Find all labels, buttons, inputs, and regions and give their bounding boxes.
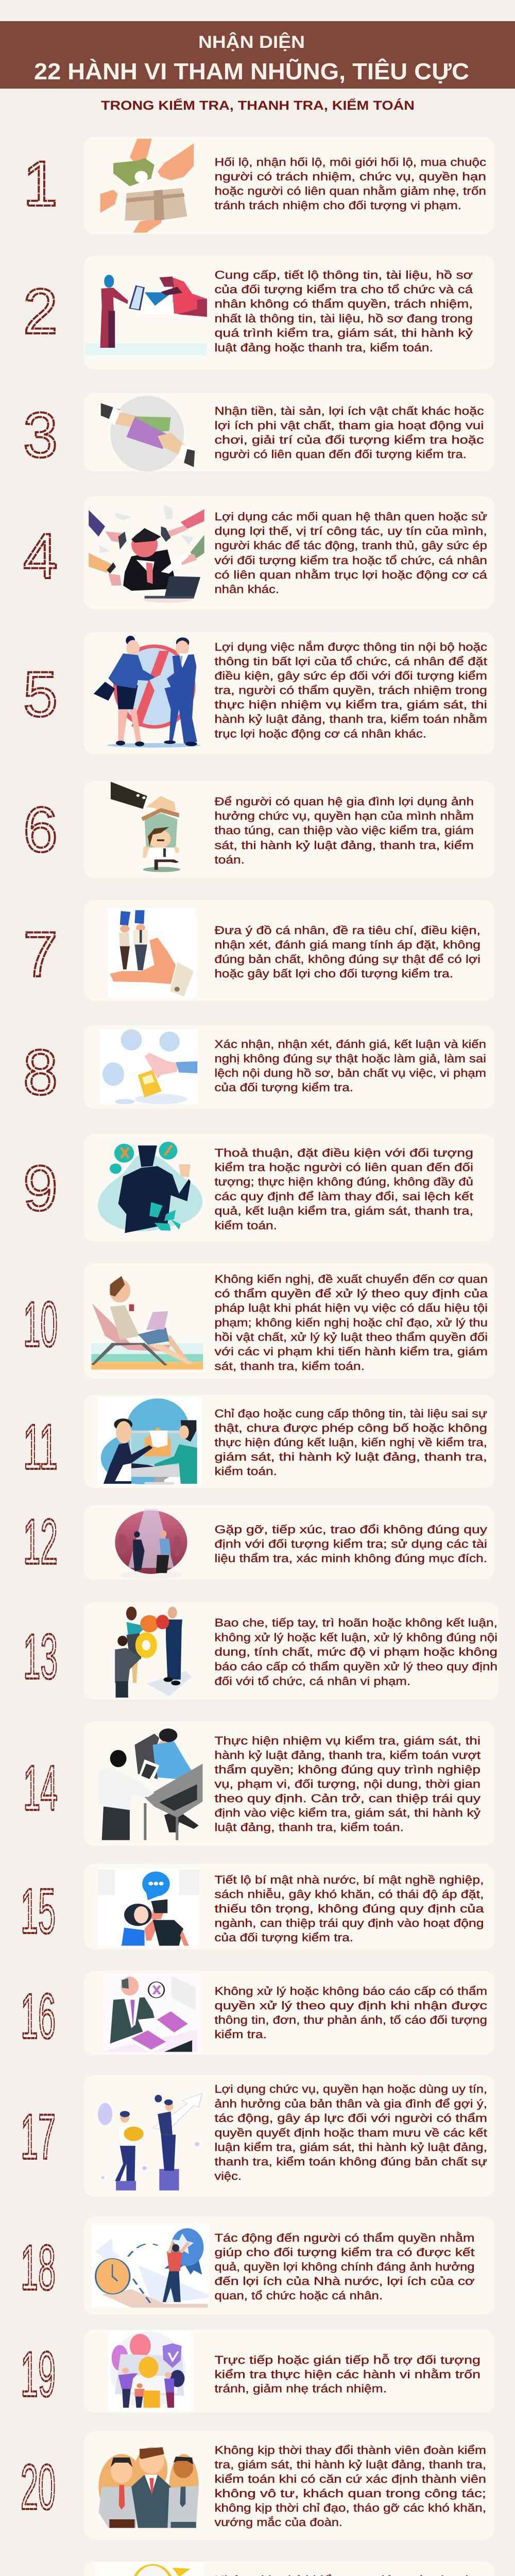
number 4: 4 (23, 521, 58, 592)
number 2: 2 (23, 276, 58, 347)
text block: Lợi dụng việc nắm được thông tin nội bộ hoặc (214, 640, 487, 653)
icon: handshake with banknotes (101, 396, 195, 471)
text block: Chỉ đạo hoặc cung cấp thông tin, tài liệu sai sự (214, 1407, 487, 1420)
text block: kiểm toán. (214, 1219, 277, 1232)
icon: two officers reviewing documents at desk (98, 1728, 203, 1840)
icon: hand controlling a puppet man (111, 782, 180, 872)
text block: kiểm toán. (214, 1465, 277, 1478)
icon: two business people with prohibition sign (94, 636, 201, 748)
text block: luật đảng hoặc thanh tra, kiểm toán. (214, 341, 433, 354)
text block (214, 2231, 475, 2302)
text block: Cung cấp, tiết lộ thông tin, tài liệu, hồ sơ (214, 268, 473, 281)
icon: two figures on a giant hand (108, 908, 196, 998)
panel 12 (23, 1505, 494, 1580)
panel 7 (23, 900, 494, 1001)
text block: giám sát, thi hành kỷ luật đảng, thanh tra, (214, 1450, 487, 1463)
panel 13 (23, 1602, 499, 1700)
panel 20 (21, 2431, 494, 2539)
panel 18: 18 (21, 2232, 56, 2303)
panel 19 (21, 2330, 494, 2413)
text block: sát, thanh tra, kiểm toán. (214, 1360, 365, 1372)
text block: nhất là thông tin, tài liệu, hồ sơ đang trong (214, 312, 473, 325)
text block: tránh trách nhiệm cho đối tượng vi phạm. (214, 199, 461, 212)
icon: person handing envelope (85, 275, 207, 355)
text block: nhận xét, đánh giá mang tính áp đặt, không (214, 938, 480, 951)
title line 1: NHẬN DIỆN (198, 32, 305, 52)
text block: chơi, giải trí của đối tượng kiểm tra hoặc (214, 433, 484, 446)
text block: kiểm toán khi có căn cứ xác định thành viên (214, 2472, 486, 2485)
panel 2 (23, 256, 494, 369)
text block: lợi ích phi vật chất, tham gia hoạt động vui (214, 419, 484, 432)
text block: của đối tượng kiểm tra. (214, 1081, 353, 1094)
text block: phạm; không kiến nghị hoặc chỉ đạo, xử lý thu (214, 1316, 488, 1329)
panel 1 (23, 137, 494, 234)
text block (214, 404, 484, 461)
text block: hưởng chức vụ, quyền hạn của mình nhằm (214, 809, 474, 822)
text block (214, 2353, 480, 2395)
text block (214, 1407, 487, 1478)
text block: đúng bản chất, không đúng sự thật để có lợi (214, 953, 480, 965)
panel 19: 19 (21, 2339, 56, 2410)
text block: dụng lợi thế, vị trí công tác, uy tín của mình, (214, 524, 487, 537)
number 8: 8 (23, 1037, 58, 1108)
panel 15: 15 (21, 1876, 56, 1947)
text block: kiểm tra thực hiện các hành vi nhằm trốn (214, 2368, 480, 2381)
text block: thật, chưa được phép công bố hoặc không (214, 1421, 487, 1434)
panel 10 (23, 1263, 494, 1379)
text block: không kịp thời chỉ đạo, tháo gỡ các khó khăn, (214, 2501, 486, 2514)
text block: định vào việc kiểm tra, giám sát, thi hành kỷ (214, 1806, 480, 1819)
panel 13: 13 (23, 1621, 58, 1692)
icon: two people meeting under spotlight (115, 1509, 187, 1579)
text block: với các vi phạm khi tiến hành kiểm tra, giám (214, 1345, 488, 1358)
text block: luận kiểm tra, giám sát, thi hành kỷ luật đảng, (214, 2141, 487, 2154)
text block: thẩm quyền; không đúng quy trình nghiệp (214, 1763, 480, 1776)
text block (214, 510, 488, 596)
title line 2: 22 HÀNH VI THAM NHŨNG, TIÊU CỰC (34, 58, 469, 84)
text block (214, 1273, 488, 1372)
text block: quả, kết luận kiểm tra, giám sát, thanh tra, (214, 1205, 473, 1217)
number 11: 11 (23, 1412, 58, 1483)
panel 11 (23, 1395, 494, 1488)
text block: toán. (214, 853, 245, 866)
panel 16: 16 (21, 1981, 56, 2052)
text block: quả, quyền lợi không chính đáng ảnh hưởng (214, 2260, 475, 2273)
text block: vụ, phạm vi, đối tượng, nội dung, thời gian (214, 1777, 480, 1790)
text block: quan, tổ chức hoặc cá nhân. (214, 2289, 383, 2302)
text block: Không xử lý hoặc không báo cáo cấp có thẩm (214, 1985, 487, 1997)
text block: Thoả thuận, đặt điều kiện với đối tượng (214, 1146, 473, 1159)
text block: sát, thi hành kỷ luật đảng, thanh tra, kiểm (214, 839, 474, 852)
icon: two men on pillars with coins and arrow (98, 2093, 202, 2191)
text block: vướng mắc của đoàn. (214, 2516, 342, 2529)
panel 6 (23, 781, 494, 878)
text block: Lợi dụng các mối quan hệ thân quen hoặc sử (214, 510, 487, 523)
number 6: 6 (23, 794, 58, 866)
text block: quá trình kiểm tra, giám sát, thi hành kỷ (214, 327, 473, 339)
icon: businessman hiding money behind back (98, 1142, 202, 1233)
number 5: 5 (23, 659, 58, 730)
text block: thực hiện nhiệm vụ kiểm tra, giám sát, thi (214, 698, 487, 711)
text block: định với đối tượng kiểm tra; sử dụng các tài (214, 1537, 487, 1550)
panel 3 (23, 393, 494, 471)
text block: thông tin bất lợi của tổ chức, cá nhân để đặt (214, 655, 487, 668)
text block: trục lợi hoặc động cơ cá nhân khác. (214, 727, 426, 740)
text block: việc. (214, 2170, 242, 2182)
panel 14: 14 (23, 1753, 58, 1824)
text block: Để người có quan hệ gia đình lợi dụng ảnh (214, 795, 474, 808)
text block (214, 268, 473, 354)
text block: Hối lộ, nhận hối lộ, môi giới hối lộ, mua chuộc (214, 156, 486, 168)
text block: tra, người có thẩm quyền, trách nhiệm trong (214, 684, 487, 697)
icon: business people assembling gears (115, 1606, 192, 1698)
text block: Thực hiện nhiệm vụ kiểm tra, giám sát, thi (214, 1734, 480, 1747)
text block (214, 1734, 480, 1834)
text block: các quy định để làm thay đổi, sai lệch kết (214, 1190, 473, 1202)
text block: kiểm tra hoặc người có liên quan đến đối (214, 1161, 473, 1174)
text block: pháp luật khi phát hiện vụ việc có dấu hiệu tội (214, 1301, 488, 1314)
icon: man whispering to woman (97, 1869, 199, 1946)
text block: người có trách nhiệm, chức vụ, quyền hạn (214, 170, 486, 183)
number 7: 7 (23, 919, 58, 990)
number 1: 1 (23, 148, 58, 219)
text block: theo quy định. Cản trở, can thiệp trái quy (214, 1792, 480, 1805)
text block: báo cáo cấp có thẩm quyền xử lý theo quy định (214, 1660, 497, 1673)
icon: hands exchanging money and box (100, 139, 194, 233)
text block: người có liên quan đến đối tượng kiểm tra. (214, 448, 467, 461)
panel 12: 12 (23, 1506, 58, 1578)
text block: Không kịp thời thay đổi thành viên đoàn kiểm (214, 2444, 486, 2456)
panel 18 (21, 2217, 494, 2314)
icon: two men shaking hands with envelope on screen (98, 1397, 202, 1485)
text block: không xử lý hoặc kết luận, xử lý không đúng nội (214, 1631, 497, 1643)
panel 21 (21, 2562, 494, 2576)
text block: đối với tổ chức, cá nhân vi phạm. (214, 1674, 410, 1688)
icon: hand holding forged document with speech bubbles (100, 1029, 197, 1104)
text block: Trực tiếp hoặc gián tiếp hỗ trợ đối tượng (214, 2353, 480, 2366)
text block: hành kỷ luật đảng, thanh tra, kiểm toán vượt (214, 1749, 480, 1761)
icon: man relaxing on beach chair with laptop (91, 1276, 203, 1369)
icon: official refusing with cross bubble and books (104, 1974, 199, 2053)
text block: tác động, gây áp lực đối với người có thẩm (214, 2111, 487, 2125)
text block: sách nhiễu, gây khó khăn, có thái độ áp đặt, (214, 1888, 484, 1901)
text block: lệch nội dung hồ sơ, bản chất vụ việc, vi phạm (214, 1066, 486, 1079)
icon: people around calendar with coin and shield (108, 2330, 192, 2412)
text block: quyền xử lý theo quy định khi nhận được (214, 1999, 487, 2012)
text block: hành kỷ luật đảng, thanh tra, kiểm toán nhằm (214, 713, 487, 725)
text block: thanh tra, kiểm toán không đúng bản chất sự (214, 2155, 487, 2168)
text block: tượng; thực hiện không đúng, không đầy đủ (214, 1175, 473, 1188)
text block (214, 924, 480, 980)
text block: nhân khác. (214, 583, 279, 596)
text block: thông tin, đơn, thư phản ánh, tố cáo đối tượng (214, 2013, 487, 2026)
text block (214, 2082, 487, 2182)
text block: thao túng, can thiệp vào việc kiểm tra, giám (214, 824, 474, 837)
text block (214, 795, 474, 866)
text block: giúp cho đối tượng kiểm tra có được kết (214, 2246, 475, 2259)
panel 8 (23, 1025, 494, 1109)
text block (214, 1985, 487, 2041)
text block: điều kiện, gây sức ép đối với đối tượng kiểm (214, 669, 487, 682)
panel 20: 20 (21, 2452, 56, 2523)
panel 4 (23, 496, 494, 609)
text block: ngành, can thiệp trái quy định vào hoạt động (214, 1917, 484, 1929)
panel 5 (23, 632, 494, 754)
text block: Tác động đến người có thẩm quyền nhằm (214, 2231, 475, 2244)
text block: hồi vật chất, xử lý kỷ luật theo thẩm quyền đối (214, 1330, 488, 1344)
panel 16 (21, 1971, 494, 2055)
text block: có thẩm quyền để xử lý theo quy định của (214, 1287, 488, 1300)
text block: thực hiện đúng kết luận, kiến nghị về kiểm tra, (214, 1436, 487, 1449)
panel 17 (21, 2075, 494, 2197)
text block: đến lợi ích của Nhà nước, lợi ích của cơ (214, 2275, 475, 2287)
text block: kiểm tra. (214, 2028, 267, 2041)
header band with title (0, 21, 515, 89)
text block: luật đảng, thanh tra, kiểm toán. (214, 1821, 404, 1834)
subtitle: TRONG KIỂM TRA, THANH TRA, KIỂM TOÁN (101, 98, 415, 113)
text block: quyền quyết định hoặc tham mưu về các kết (214, 2126, 487, 2139)
text block: Nhận tiền, tài sản, lợi ích vật chất khác hoặc (214, 404, 484, 417)
text block: của đối tượng kiểm tra cho tổ chức và cá (214, 283, 473, 296)
text block: hoặc gây bất lợi cho đối tượng kiểm tra. (214, 967, 453, 980)
text block: người khác để tác động, tranh thủ, gây sức ép (214, 539, 487, 552)
panel 10: 10 (23, 1289, 58, 1360)
text block: Xác nhận, nhận xét, đánh giá, kết luận và kiến (214, 1038, 486, 1050)
text block (214, 1523, 487, 1565)
text block: tránh, giảm nhẹ trách nhiệm. (214, 2382, 387, 2395)
text block (214, 1146, 473, 1232)
text block: không vô tư, khách quan trong công tác; (214, 2487, 486, 2500)
text block: nghị không đúng sự thật hoặc làm giả, làm sai (214, 1052, 486, 1065)
icon: man lifting star medal beside clock (92, 2224, 208, 2308)
panel 17: 17 (21, 2102, 56, 2173)
panel 9 (23, 1134, 494, 1242)
text block: Bao che, tiếp tay, trì hoãn hoặc không kết luận, (214, 1616, 497, 1629)
icon: stressed man surrounded by hands (89, 505, 204, 603)
text block: nhân không có thẩm quyền, trách nhiệm, (214, 297, 473, 310)
text block: dung, tính chất, mức độ vi phạm hoặc không (214, 1646, 497, 1658)
text block: Gặp gỡ, tiếp xúc, trao đổi không đúng quy (214, 1523, 487, 1536)
text block: có liên quan nhằm trục lợi hoặc động cơ cá (214, 568, 488, 581)
number 9: 9 (23, 1153, 58, 1224)
text block: Đưa ý đồ cá nhân, đề ra tiêu chí, điều kiện, (214, 924, 480, 937)
text block (214, 2444, 486, 2529)
text block: thiếu tôn trọng, không đúng quy định của (214, 1902, 485, 1915)
panel 15 (21, 1864, 494, 1950)
text block (214, 1616, 497, 1688)
icon: man procrastinating with feet on desk (95, 2562, 204, 2576)
text block: Lợi dụng chức vụ, quyền hạn hoặc dùng uy tín, (214, 2082, 487, 2095)
text block: của đối tượng kiểm tra. (214, 1931, 353, 1944)
text block: hoặc người có liên quan nhằm giảm nhẹ, trốn (214, 184, 486, 197)
icon: three men standing together (98, 2447, 199, 2528)
text block (214, 156, 486, 212)
text block: liệu thẩm tra, xác minh không đúng mục đích. (214, 1552, 487, 1565)
text block: Tiết lộ bí mật nhà nước, bí mật nghề nghiệp, (214, 1873, 484, 1886)
number 3: 3 (23, 400, 58, 471)
text block (214, 1873, 485, 1944)
text block: tra, giám sát, thi hành kỷ luật đảng, thanh tra, (214, 2458, 486, 2471)
text block: ảnh hưởng của bản thân và gia đình để gợi ý, (214, 2097, 487, 2110)
text block (214, 1038, 486, 1094)
text block: Không kiến nghị, đề xuất chuyển đến cơ quan (214, 1273, 488, 1285)
panel 14 (23, 1721, 494, 1846)
text block (214, 640, 487, 740)
text block: với đối tượng kiểm tra hoặc tổ chức, cá nhân (214, 554, 487, 567)
